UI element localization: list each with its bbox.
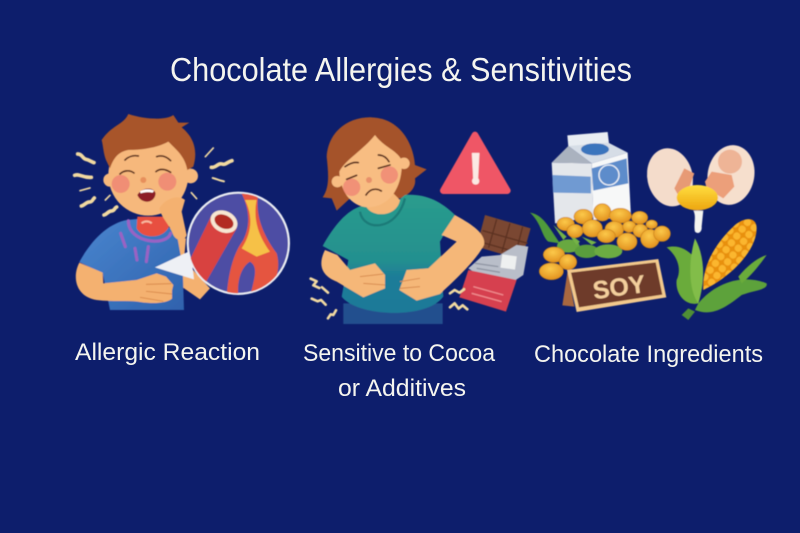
eyes and brows xyxy=(120,156,171,174)
caption: allergic reaction: Allergic Reaction xyxy=(75,339,260,366)
icon: warning triangle xyxy=(443,135,507,191)
panel: allergic reaction xyxy=(75,114,289,366)
panel: sensitive to cocoa or additives xyxy=(303,117,531,402)
icon: soy sign: SOY xyxy=(591,270,648,305)
icon: milk carton xyxy=(552,132,631,223)
icon: irritation squiggles xyxy=(75,148,232,215)
girl's cheeks xyxy=(343,179,360,196)
boy's open mouth xyxy=(137,188,156,202)
icon: cracked eggs xyxy=(642,141,759,233)
icon: soybeans pile xyxy=(539,204,670,280)
magnified airway circle xyxy=(188,193,289,294)
panel: chocolate ingredients xyxy=(530,132,767,368)
boy's hand on throat xyxy=(159,197,187,240)
swollen airway xyxy=(227,193,278,297)
icon: soy sign xyxy=(562,259,666,312)
title: Chocolate Allergies & Sensitivities xyxy=(170,51,632,88)
illustration: boy with throat reaction xyxy=(75,114,289,310)
shirt collar and rash xyxy=(121,221,171,262)
boy's irritated neck xyxy=(137,217,170,236)
girl's hair back xyxy=(323,117,427,211)
girl's shirt xyxy=(323,195,455,313)
girl's legs xyxy=(343,303,443,324)
cheeks xyxy=(112,175,130,193)
caption: chocolate ingredients: Chocolate Ingredients xyxy=(534,341,763,368)
illustration: allergen foods xyxy=(530,132,767,320)
icon: chocolate bar xyxy=(459,215,531,312)
boy's hand lines xyxy=(140,284,172,301)
icon: soy leaves and pods xyxy=(530,213,622,258)
icon: discomfort squiggles xyxy=(311,279,467,318)
icon: corn cob xyxy=(667,219,767,320)
boy's raised forearm xyxy=(175,238,210,299)
boy's hair xyxy=(102,114,195,170)
finger lines xyxy=(360,274,420,288)
girl's neck and face xyxy=(365,190,400,214)
girl's features xyxy=(345,155,390,195)
boy's shirt xyxy=(79,218,184,310)
magnifier pointer xyxy=(155,251,194,279)
girl's arms xyxy=(321,250,385,297)
nose xyxy=(140,177,146,183)
infographic canvas xyxy=(72,57,768,396)
boy's arm xyxy=(76,263,173,303)
boy's face xyxy=(108,134,188,216)
illustration: girl with stomach ache xyxy=(311,117,531,324)
blood vessel tube xyxy=(190,216,237,282)
caption: sensitive to cocoa or additives: Sensitive to Cocoa xyxy=(303,340,496,367)
caption: sensitive to cocoa or additives: or Additives xyxy=(338,375,466,402)
girl's collar xyxy=(360,198,405,225)
caption: sensitive to cocoa or additives xyxy=(303,340,496,402)
